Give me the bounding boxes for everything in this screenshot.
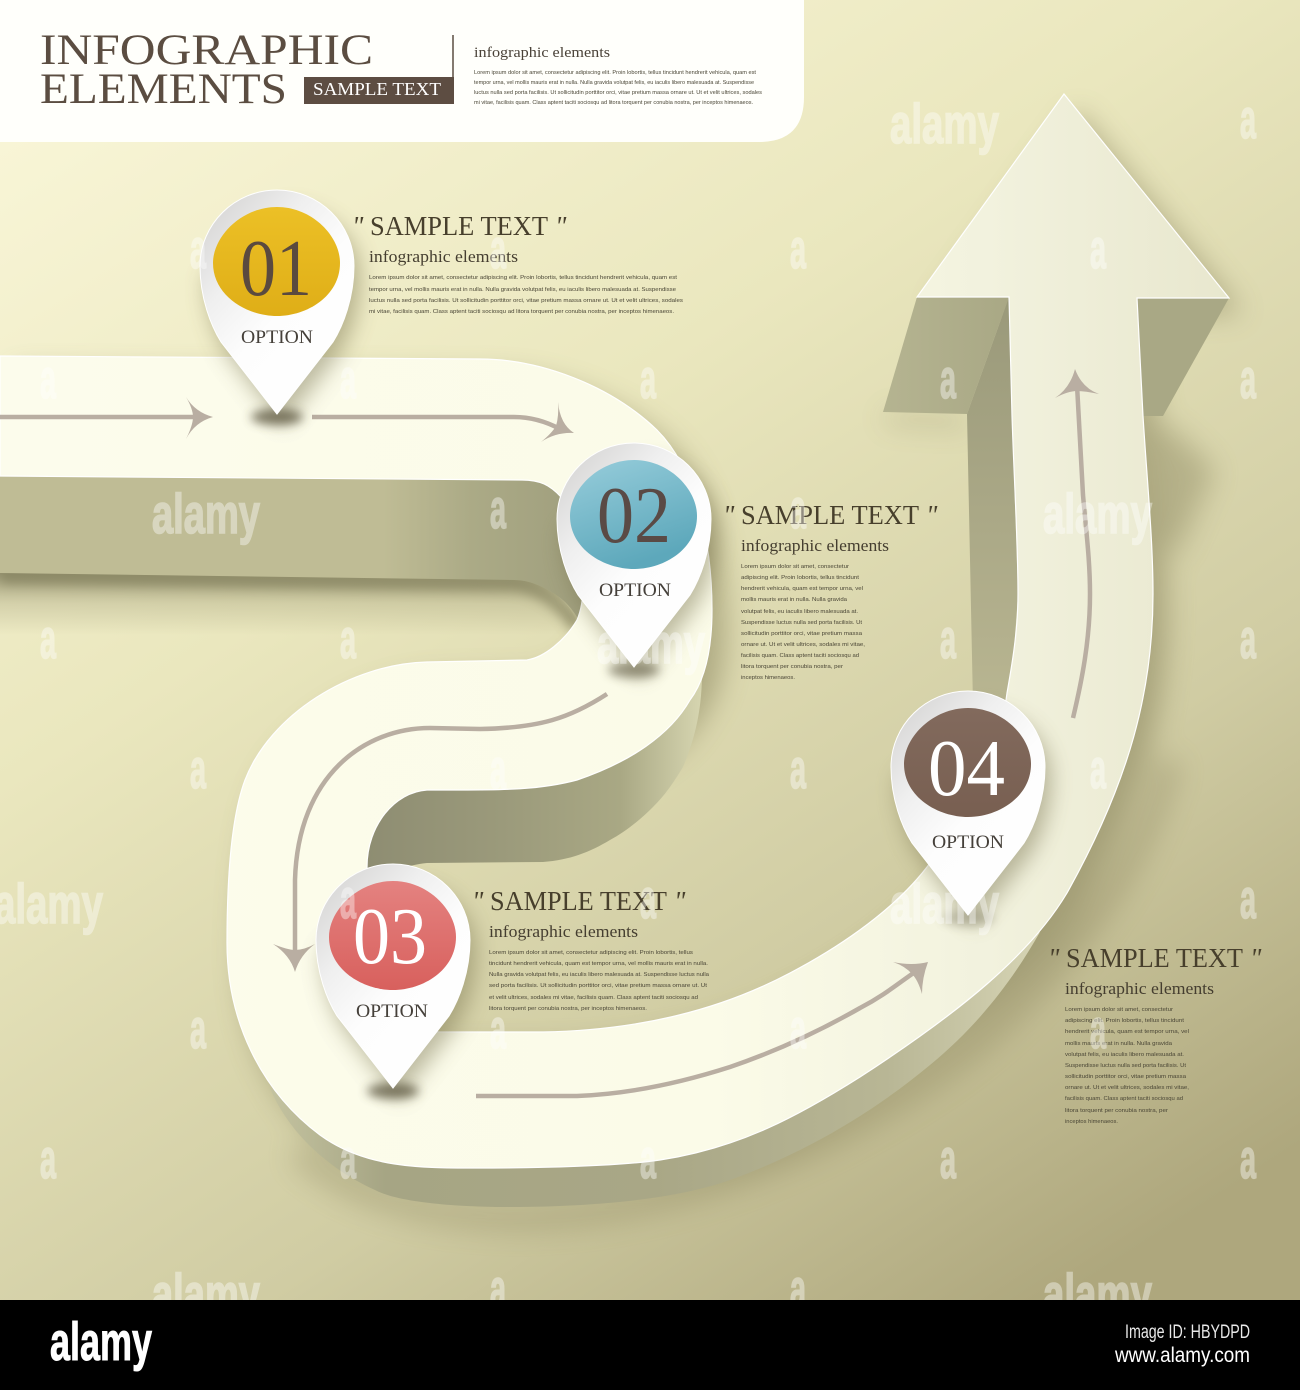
body 02: mollis mauris erat in nulla. Nulla gravida bbox=[741, 597, 848, 603]
side wall: arrowhead right bbox=[1137, 298, 1229, 416]
stock watermarks: a bbox=[190, 737, 206, 800]
text block 03 bbox=[472, 886, 710, 1012]
stock watermarks: a bbox=[640, 867, 656, 930]
tip shadow bbox=[251, 409, 303, 425]
main title: INFOGRAPHIC bbox=[40, 27, 373, 74]
body 04: litora torquent per conubia nostra, per bbox=[1065, 1108, 1168, 1114]
colored badge bbox=[904, 708, 1031, 817]
sample text tag bbox=[304, 77, 454, 104]
stock watermarks: a bbox=[40, 347, 56, 410]
road drop shadow bbox=[14, 110, 1243, 1218]
option label: OPTION bbox=[356, 1001, 428, 1022]
colored badge bbox=[570, 460, 697, 569]
option label: OPTION bbox=[241, 327, 313, 348]
side wall: arrowhead left bbox=[883, 297, 1009, 414]
stock watermarks: a bbox=[1090, 737, 1106, 800]
road top surface with arrowhead bbox=[0, 94, 1229, 1168]
stock watermarks: alamy bbox=[1043, 482, 1152, 545]
body 04: inceptos himenaeos. bbox=[1065, 1119, 1118, 1125]
footer logo: alamy bbox=[50, 1312, 152, 1372]
body 03: tincidunt hendrerit vehicula, quam est tempor urna, vel mollis mauris erat in nulla. bbox=[489, 961, 708, 967]
body 02: facilisis quam. Class aptent taciti sociosqu ad bbox=[741, 653, 859, 659]
pin 02 bbox=[557, 443, 717, 679]
arrow 2 bbox=[312, 402, 574, 442]
stock watermarks: a bbox=[1240, 87, 1256, 150]
white header background bbox=[0, 0, 804, 142]
heading 03: SAMPLE TEXT bbox=[490, 886, 667, 916]
tip shadow bbox=[942, 910, 994, 926]
pin shadow bbox=[897, 709, 1051, 927]
stock watermarks: a bbox=[790, 1257, 806, 1320]
colored badge bbox=[213, 207, 340, 316]
pin 03 bbox=[316, 864, 476, 1100]
stock watermarks: a bbox=[490, 737, 506, 800]
stock watermarks: a bbox=[490, 1257, 506, 1320]
website: www.alamy.com bbox=[1114, 1344, 1250, 1367]
stock watermarks: a bbox=[790, 217, 806, 280]
pin body bbox=[200, 190, 354, 414]
stock watermarks: a bbox=[1240, 867, 1256, 930]
side wall: bottom curve bbox=[270, 932, 1040, 1207]
stock watermarks: a bbox=[490, 477, 506, 540]
body 02: Lorem ipsum dolor sit amet, consectetur bbox=[741, 564, 849, 570]
body 03 bbox=[489, 950, 710, 1012]
body 03: sed porta facilisis. Ut sollicitudin porttitor orci, vitae pretium massa ornare ut. Ut bbox=[489, 983, 707, 989]
pin body bbox=[316, 864, 470, 1088]
tip shadow bbox=[367, 1083, 419, 1099]
shadow below the upper band bbox=[0, 577, 578, 628]
option label: OPTION bbox=[932, 832, 1004, 853]
stock watermarks: a bbox=[940, 347, 956, 410]
image id: Image ID: HBYDPD bbox=[1125, 1322, 1250, 1343]
body 03: Lorem ipsum dolor sit amet, consectetur adipiscing elit. Proin lobortis, tellus bbox=[489, 950, 693, 956]
stock watermarks: a bbox=[790, 737, 806, 800]
arrow 1 bbox=[0, 397, 213, 439]
body 01: tempor urna, vel mollis mauris erat in nulla. Nulla gravida volutpat felis, eu iaculis libero malesuada at. Suspendisse bbox=[369, 287, 676, 293]
pin body bbox=[557, 443, 711, 667]
body 02: adipiscing elit. Proin lobortis, tellus tincidunt bbox=[741, 575, 859, 581]
arrow 4 bbox=[476, 962, 928, 1096]
header panel bbox=[0, 0, 804, 142]
stock watermarks: a bbox=[340, 607, 356, 670]
side wall: upper horizontal band bbox=[0, 476, 590, 640]
pin 01 bbox=[200, 190, 360, 426]
subheading 04: infographic elements bbox=[1065, 979, 1214, 998]
stock watermarks: a bbox=[940, 607, 956, 670]
header body bbox=[474, 70, 762, 106]
main title bbox=[40, 27, 373, 113]
body 04: hendrerit vehicula, quam est tempor urna, vel bbox=[1065, 1029, 1189, 1035]
header body: mi vitae, facilisis quam. Class aptent taciti sociosqu ad litora torquent per conubia nostra, per inceptos himenaeos. bbox=[474, 100, 753, 106]
stock watermarks: a bbox=[40, 607, 56, 670]
pin shadow bbox=[563, 461, 717, 679]
body 04: Suspendisse luctus nulla sed porta facilisis. Ut bbox=[1065, 1063, 1186, 1069]
footer bar bbox=[0, 1300, 1300, 1390]
stock watermarks: a bbox=[640, 347, 656, 410]
heading 04: " bbox=[1048, 943, 1060, 973]
pin shadow bbox=[206, 208, 360, 426]
stock watermarks: a bbox=[190, 217, 206, 280]
heading 03: " bbox=[674, 886, 686, 916]
stock watermarks: a bbox=[1240, 1127, 1256, 1190]
heading 02: " bbox=[926, 500, 938, 530]
stock watermarks: a bbox=[340, 867, 356, 930]
stock watermarks: alamy bbox=[597, 612, 705, 675]
body 02: litora torquent per conubia nostra, per bbox=[741, 664, 843, 670]
body 03: Nulla gravida volutpat felis, eu iaculis libero malesuada at. Suspendisse luctus nulla bbox=[489, 972, 710, 978]
stock watermarks: alamy bbox=[1043, 1262, 1152, 1325]
body 04: volutpat felis, eu iaculis libero malesuada at. bbox=[1065, 1052, 1184, 1058]
stock watermarks: alamy bbox=[890, 872, 999, 935]
body 04: ornare ut. Ut et velit ultrices, sodales mi vitae, bbox=[1065, 1085, 1189, 1091]
stock watermarks: alamy bbox=[152, 1262, 260, 1325]
header body: tempor urna, vel mollis mauris erat in nulla. Nulla gravida volutpat felis, eu iaculis libero malesuada at. Suspendisse bbox=[474, 80, 754, 86]
heading 01: " bbox=[352, 211, 364, 241]
stock watermarks: a bbox=[1240, 607, 1256, 670]
text block 01 bbox=[352, 211, 683, 315]
tip shadow bbox=[608, 662, 660, 678]
header divider line bbox=[452, 35, 454, 78]
stock watermarks: a bbox=[190, 997, 206, 1060]
number: 04 bbox=[928, 725, 1005, 813]
body 01 bbox=[369, 275, 683, 315]
subheading 02: infographic elements bbox=[741, 536, 889, 555]
3D road: side walls bbox=[0, 297, 1229, 1207]
body 03: litora torquent per conubia nostra, per inceptos himenaeos. bbox=[489, 1006, 647, 1012]
header body: Lorem ipsum dolor sit amet, consectetur adipiscing elit. Proin lobortis, tellus tincidunt hendrerit vehicula, quam est bbox=[474, 70, 756, 76]
sample text tag: SAMPLE TEXT bbox=[313, 79, 441, 99]
text block 04 bbox=[1048, 943, 1262, 1125]
stock watermarks: a bbox=[340, 347, 356, 410]
number: 03 bbox=[353, 893, 427, 981]
stock watermarks: a bbox=[640, 1127, 656, 1190]
body 01: mi vitae, facilisis quam. Class aptent taciti sociosqu ad litora torquent per conubia nostra, per inceptos himenaeos. bbox=[369, 309, 674, 315]
stock watermarks: a bbox=[40, 1127, 56, 1190]
body 04 bbox=[1065, 1007, 1189, 1125]
body 04: sollicitudin porttitor orci, vitae pretium massa bbox=[1065, 1074, 1187, 1080]
stock watermarks: a bbox=[940, 1127, 956, 1190]
main title: ELEMENTS bbox=[40, 66, 287, 113]
body 02: volutpat felis, eu iaculis libero malesuada at. bbox=[741, 609, 858, 615]
heading 01: " bbox=[555, 211, 567, 241]
body 02 bbox=[741, 564, 865, 681]
heading 04: SAMPLE TEXT bbox=[1066, 943, 1243, 973]
direction arrows on the road bbox=[0, 369, 1099, 1096]
number: 02 bbox=[597, 472, 671, 560]
body 02: hendrerit vehicula, quam est tempor urna, vel bbox=[741, 586, 863, 592]
shadow under the upper band bbox=[0, 573, 578, 640]
arrow 3 bbox=[273, 694, 607, 972]
stock watermarks: a bbox=[340, 1127, 356, 1190]
subheading 01: infographic elements bbox=[369, 247, 518, 266]
stock watermarks: a bbox=[490, 997, 506, 1060]
arrow 5 bbox=[1055, 369, 1099, 718]
heading 02: SAMPLE TEXT bbox=[741, 500, 919, 530]
colored badge bbox=[329, 881, 456, 990]
body 04: facilisis quam. Class aptent taciti sociosqu ad bbox=[1065, 1096, 1183, 1102]
heading 03: " bbox=[472, 886, 484, 916]
body 02: ornare ut. Ut et velit ultrices, sodales mi vitae, bbox=[741, 642, 865, 648]
header body: luctus nulla sed porta facilisis. Ut sollicitudin porttitor orci, vitae pretium massa ornare ut. Ut et velit ultrices, sodales bbox=[474, 90, 762, 96]
body 01: luctus nulla sed porta facilisis. Ut sollicitudin porttitor orci, vitae pretium massa ornare ut. Ut et velit ultrices, sodales bbox=[369, 298, 683, 304]
body 02: sollicitudin porttitor orci, vitae pretium massa bbox=[741, 631, 863, 637]
body 04: mollis mauris erat in nulla. Nulla gravida bbox=[1065, 1041, 1173, 1047]
side wall: S bend bbox=[367, 673, 702, 900]
pin body bbox=[891, 691, 1045, 915]
body 04: adipiscing elit. Proin lobortis, tellus tincidunt bbox=[1065, 1018, 1184, 1024]
body 02: Suspendisse luctus nulla sed porta facilisis. Ut bbox=[741, 620, 862, 626]
heading 02: " bbox=[723, 500, 735, 530]
number: 01 bbox=[240, 225, 312, 313]
body 02: inceptos himenaeos. bbox=[741, 675, 795, 681]
pin shadow bbox=[322, 882, 476, 1100]
stock watermarks: a bbox=[790, 477, 806, 540]
body 01: Lorem ipsum dolor sit amet, consectetur adipiscing elit. Proin lobortis, tellus tincidunt hendrerit vehicula, quam est bbox=[369, 275, 677, 281]
text block 02 bbox=[723, 500, 938, 681]
stock watermarks: alamy bbox=[152, 482, 260, 545]
body 04: Lorem ipsum dolor sit amet, consectetur bbox=[1065, 1007, 1173, 1013]
stock watermarks: a bbox=[1090, 997, 1106, 1060]
header subheading: infographic elements bbox=[474, 45, 610, 61]
pin 04 bbox=[891, 691, 1051, 927]
stock watermarks: a bbox=[1090, 217, 1106, 280]
heading 04: " bbox=[1250, 943, 1262, 973]
subheading 03: infographic elements bbox=[489, 922, 638, 941]
stock watermarks: a bbox=[490, 217, 506, 280]
heading 01: SAMPLE TEXT bbox=[370, 211, 548, 241]
side wall: arrow shaft bbox=[967, 297, 1018, 705]
stock watermarks: alamy bbox=[890, 92, 999, 155]
stock watermarks: a bbox=[1240, 347, 1256, 410]
stock watermarks: a bbox=[790, 997, 806, 1060]
option label: OPTION bbox=[599, 580, 671, 601]
body 03: et velit ultrices, sodales mi vitae, facilisis quam. Class aptent taciti sociosqu ad bbox=[489, 995, 698, 1001]
